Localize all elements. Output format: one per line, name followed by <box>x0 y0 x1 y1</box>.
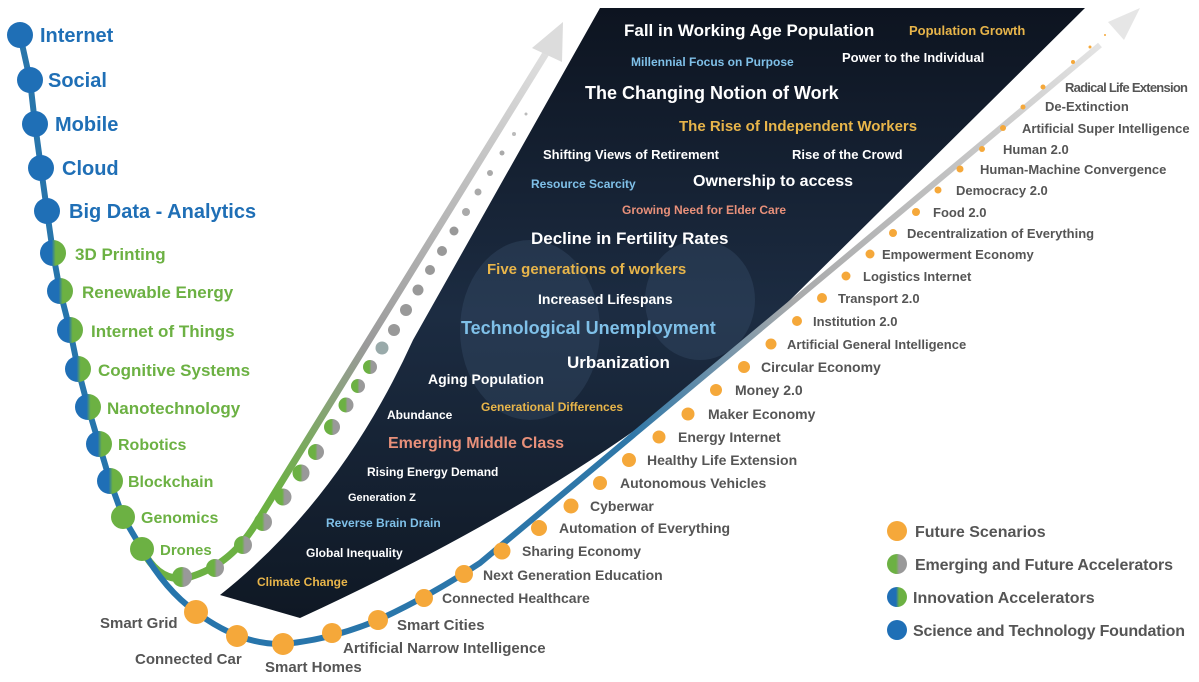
left column: technology accelerators: Blockchain <box>128 474 213 491</box>
arrow: emerging accelerators <box>142 22 563 587</box>
legend: Emerging and Future Accelerators <box>915 557 1173 574</box>
future scenarios dots and labels: Next Generation Education <box>483 567 663 583</box>
legend: Science and Technology Foundation <box>913 623 1185 640</box>
future scenarios dots and labels: Healthy Life Extension <box>647 452 797 468</box>
future scenarios dots and labels: Automation of Everything <box>559 520 730 536</box>
future scenarios dots and labels: Smart Cities <box>397 617 485 634</box>
trends text: Emerging Middle Class <box>388 435 564 452</box>
future scenarios dots and labels: Institution 2.0 <box>813 314 898 329</box>
future scenarios dots and labels: Circular Economy <box>761 359 881 375</box>
future scenarios dots and labels: Sharing Economy <box>522 543 641 559</box>
left column: technology accelerators: Renewable Energy <box>82 283 234 302</box>
future scenarios dots and labels: Radical Life Extension <box>1065 80 1188 95</box>
trends text: Rising Energy Demand <box>367 465 498 479</box>
trends text: Resource Scarcity <box>531 177 636 191</box>
future scenarios dots and labels: Smart Grid <box>100 615 178 632</box>
legend: Innovation Accelerators <box>913 590 1095 607</box>
trends text: Population Growth <box>909 23 1025 38</box>
trends text: Urbanization <box>567 353 670 372</box>
future scenarios dots and labels: Autonomous Vehicles <box>620 475 766 491</box>
trends text: Reverse Brain Drain <box>326 516 441 530</box>
trends text: Ownership to access <box>693 173 853 190</box>
future scenarios dots and labels: Money 2.0 <box>735 382 803 398</box>
trends text: Decline in Fertility Rates <box>531 229 728 248</box>
future scenarios dots and labels: Smart Homes <box>265 659 362 676</box>
future scenarios dots and labels: Connected Car <box>135 651 242 668</box>
trends text: Generational Differences <box>481 400 623 414</box>
future scenarios dots and labels: Decentralization of Everything <box>907 226 1094 241</box>
left column: technology accelerators: Cloud <box>62 158 119 180</box>
trends text: Power to the Individual <box>842 50 984 65</box>
future scenarios dots and labels: Artificial Super Intelligence <box>1022 121 1190 136</box>
future scenarios dots and labels: Human-Machine Convergence <box>980 162 1166 177</box>
trends text: Climate Change <box>257 575 348 589</box>
trends text: Abundance <box>387 408 453 422</box>
left column: technology accelerators: Internet of Things <box>91 322 235 341</box>
left column: technology accelerators: Cognitive Systems <box>98 361 250 380</box>
left column: technology accelerators <box>7 22 256 561</box>
future scenarios dots and labels: Cyberwar <box>590 498 654 514</box>
left column: technology accelerators: Mobile <box>55 114 118 136</box>
future scenarios dots and labels: Food 2.0 <box>933 205 986 220</box>
left column: technology accelerators: Robotics <box>118 437 187 454</box>
trends text: Aging Population <box>428 371 544 387</box>
left column: technology accelerators: 3D Printing <box>75 245 166 264</box>
future scenarios dots and labels: De-Extinction <box>1045 99 1129 114</box>
future scenarios dots and labels: Transport 2.0 <box>838 291 920 306</box>
trends text: Fall in Working Age Population <box>624 21 874 40</box>
left column: technology accelerators: Nanotechnology <box>107 399 241 418</box>
trends text: Shifting Views of Retirement <box>543 147 720 162</box>
left column: technology accelerators: Big Data - Analytics <box>69 201 256 223</box>
trends text: Generation Z <box>348 492 416 504</box>
future scenarios dots and labels: Artificial Narrow Intelligence <box>343 640 546 657</box>
future scenarios dots and labels: Artificial General Intelligence <box>787 337 966 352</box>
left column: technology accelerators: Social <box>48 70 107 92</box>
panel: dark trends background <box>220 8 1085 618</box>
trends text: Technological Unemployment <box>461 318 716 338</box>
future scenarios dots and labels: Logistics Internet <box>863 269 972 284</box>
future scenarios dots and labels: Democracy 2.0 <box>956 183 1048 198</box>
left column: technology accelerators: Genomics <box>141 510 218 527</box>
left column: technology accelerators: Internet <box>40 25 114 47</box>
future scenarios dots and labels: Empowerment Economy <box>882 247 1034 262</box>
trends text: Rise of the Crowd <box>792 147 903 162</box>
trends text: The Rise of Independent Workers <box>679 118 917 135</box>
trends text: Increased Lifespans <box>538 291 673 307</box>
trends text: Growing Need for Elder Care <box>622 203 786 217</box>
future scenarios dots and labels: Maker Economy <box>708 406 816 422</box>
left column: technology accelerators: Drones <box>160 542 212 559</box>
future scenarios dots and labels: Energy Internet <box>678 429 781 445</box>
future scenarios dots and labels: Human 2.0 <box>1003 142 1069 157</box>
legend: Future Scenarios <box>915 524 1046 541</box>
trends text <box>257 21 1025 589</box>
trends text: Millennial Focus on Purpose <box>631 55 794 69</box>
legend <box>887 521 1185 640</box>
future scenarios dots and labels: Connected Healthcare <box>442 590 590 606</box>
trends text: Five generations of workers <box>487 261 686 278</box>
trends text: Global Inequality <box>306 546 403 560</box>
trends text: The Changing Notion of Work <box>585 83 840 103</box>
